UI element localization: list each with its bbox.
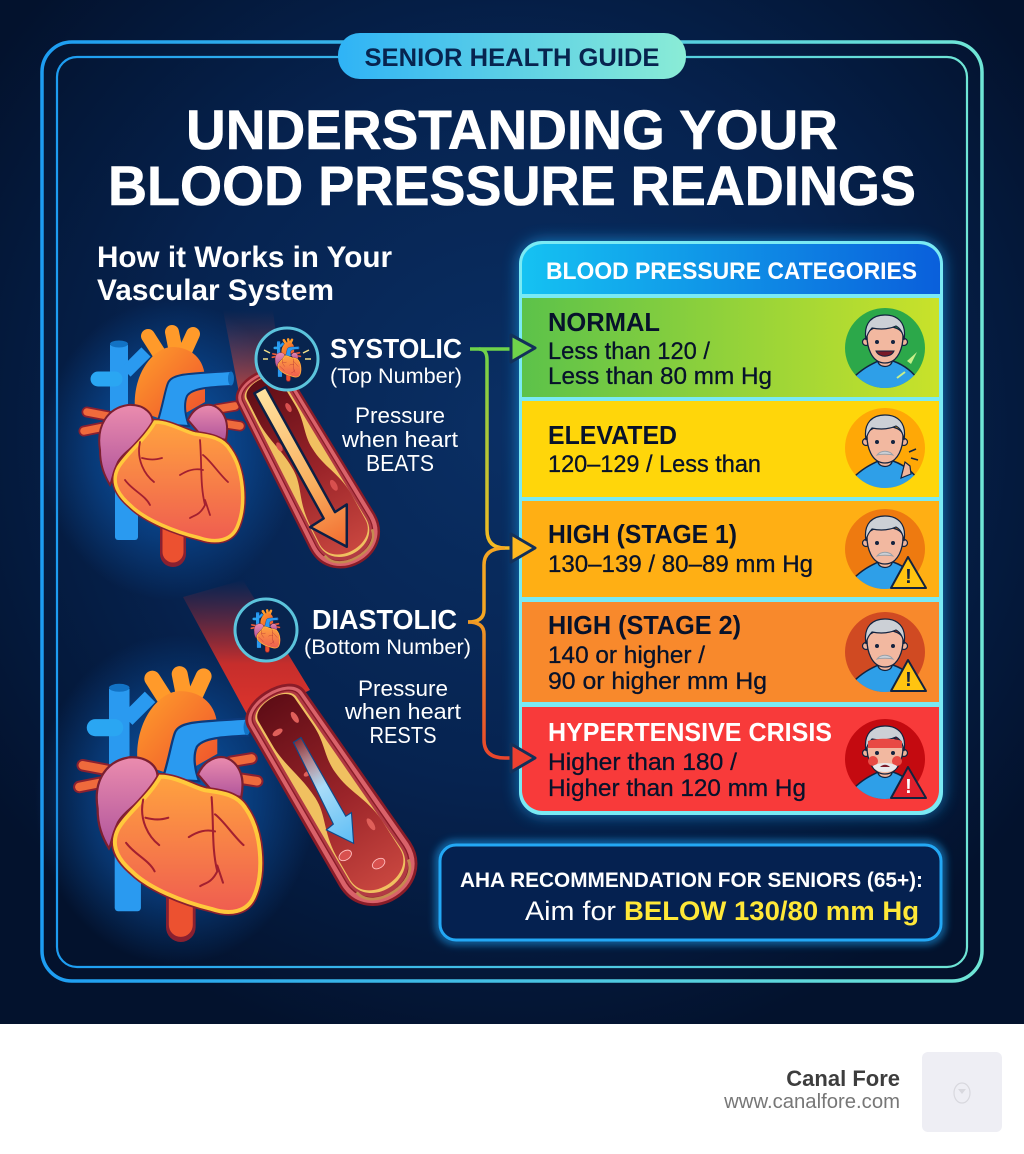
callout: AHA recommendation: BELOW 130/80 mm Hg bbox=[624, 896, 919, 926]
systolic label: when heart bbox=[341, 427, 459, 452]
arrow: diastolic flow bbox=[277, 736, 366, 852]
row: high stage 1: 130–139 / 80–89 mm Hg bbox=[548, 551, 813, 578]
diastolic label: when heart bbox=[344, 699, 462, 724]
row: elevated bbox=[522, 401, 939, 497]
arrow: to normal bbox=[511, 335, 535, 362]
systolic label: SYSTOLIC bbox=[330, 333, 462, 364]
systolic label: BEATS bbox=[366, 450, 434, 476]
illustration: diastolic artery bbox=[232, 671, 430, 919]
icon: concerned senior bbox=[845, 408, 925, 492]
systolic label bbox=[330, 333, 462, 476]
illustration: systolic artery bbox=[224, 357, 391, 580]
icon: senior with caution sign: ! bbox=[905, 566, 912, 588]
icon: worried senior with caution sign: ! bbox=[905, 669, 912, 691]
row: hypertensive crisis: HYPERTENSIVE CRISIS bbox=[548, 717, 832, 747]
illustration: diastolic heart bbox=[79, 674, 260, 927]
row: normal: NORMAL bbox=[548, 307, 660, 337]
left section heading: Vascular System bbox=[97, 274, 334, 307]
footer background bbox=[0, 1024, 1024, 1154]
title: BLOOD PRESSURE READINGS bbox=[108, 154, 916, 217]
outer neon frame bbox=[42, 42, 982, 981]
left section heading bbox=[97, 241, 392, 307]
icon: resting heart badge bbox=[235, 599, 297, 661]
systolic label: Pressure bbox=[355, 403, 445, 428]
systolic label: (Top Number) bbox=[330, 365, 462, 388]
inner neon frame bbox=[57, 57, 967, 967]
row: hypertensive crisis: Higher than 180 / bbox=[548, 749, 737, 776]
diastolic label: DIASTOLIC bbox=[312, 604, 457, 635]
title: UNDERSTANDING YOUR bbox=[186, 98, 838, 161]
connector lines from systolic and diastolic to categories bbox=[468, 349, 512, 758]
icon: distressed senior with alert sign: ! bbox=[905, 776, 912, 798]
row: high stage 1 bbox=[522, 501, 939, 597]
footer logo placeholder bbox=[922, 1052, 1002, 1132]
icon: beating heart badge bbox=[256, 328, 318, 390]
diastolic label: RESTS bbox=[370, 722, 436, 748]
lower artery tail bbox=[183, 580, 310, 720]
icon: happy senior bbox=[845, 308, 925, 392]
footer brand text: www.canalfore.com bbox=[723, 1091, 900, 1113]
row: high stage 2 bbox=[522, 602, 939, 702]
icon: distressed senior with alert sign bbox=[845, 719, 926, 803]
icon: senior with caution sign bbox=[845, 509, 926, 593]
callout box bbox=[440, 845, 941, 940]
upper artery tail bbox=[223, 310, 282, 398]
left section heading: How it Works in Your bbox=[97, 241, 392, 274]
glow behind lower heart bbox=[35, 635, 315, 965]
diastolic label: (Bottom Number) bbox=[304, 636, 471, 659]
header band: BLOOD PRESSURE CATEGORIES bbox=[546, 258, 917, 285]
row: elevated: ELEVATED bbox=[548, 420, 677, 450]
row: high stage 1: HIGH (STAGE 1) bbox=[548, 519, 737, 549]
row: normal: Less than 80 mm Hg bbox=[548, 363, 772, 390]
callout: AHA recommendation bbox=[439, 844, 942, 941]
row: elevated: 120–129 / Less than bbox=[548, 451, 761, 478]
diastolic label: Pressure bbox=[358, 676, 448, 701]
badge: senior health guide: SENIOR HEALTH GUIDE bbox=[364, 44, 660, 72]
arrow: to hypertensive crisis bbox=[511, 744, 535, 772]
row: high stage 2: HIGH (STAGE 2) bbox=[548, 610, 741, 640]
callout: AHA recommendation: Aim for bbox=[525, 896, 616, 926]
row: high stage 2: 90 or higher mm Hg bbox=[548, 668, 767, 695]
panel frame bbox=[520, 242, 942, 814]
row: normal bbox=[522, 298, 939, 397]
callout glow bbox=[439, 844, 942, 941]
icon: worried senior with caution sign bbox=[845, 612, 926, 696]
row: high stage 2: 140 or higher / bbox=[548, 642, 705, 669]
diastolic label bbox=[304, 604, 471, 748]
row: normal: Less than 120 / bbox=[548, 338, 710, 365]
footer brand text bbox=[723, 1066, 900, 1113]
illustration: systolic heart bbox=[84, 332, 243, 554]
row: hypertensive crisis: Higher than 120 mm Hg bbox=[548, 775, 806, 802]
badge: senior health guide bbox=[338, 33, 686, 79]
arrow: systolic flow bbox=[240, 380, 365, 558]
panel glow bbox=[519, 241, 943, 815]
panel: blood pressure categories bbox=[519, 241, 943, 815]
row: hypertensive crisis bbox=[522, 707, 939, 811]
callout: AHA recommendation: AHA RECOMMENDATION FOR SENIORS (65+): bbox=[460, 869, 923, 892]
header band bbox=[522, 244, 940, 294]
arrow: to high stage 1 bbox=[511, 534, 535, 562]
glow behind upper heart bbox=[40, 300, 300, 600]
footer brand text: Canal Fore bbox=[786, 1066, 900, 1091]
title bbox=[108, 98, 916, 217]
